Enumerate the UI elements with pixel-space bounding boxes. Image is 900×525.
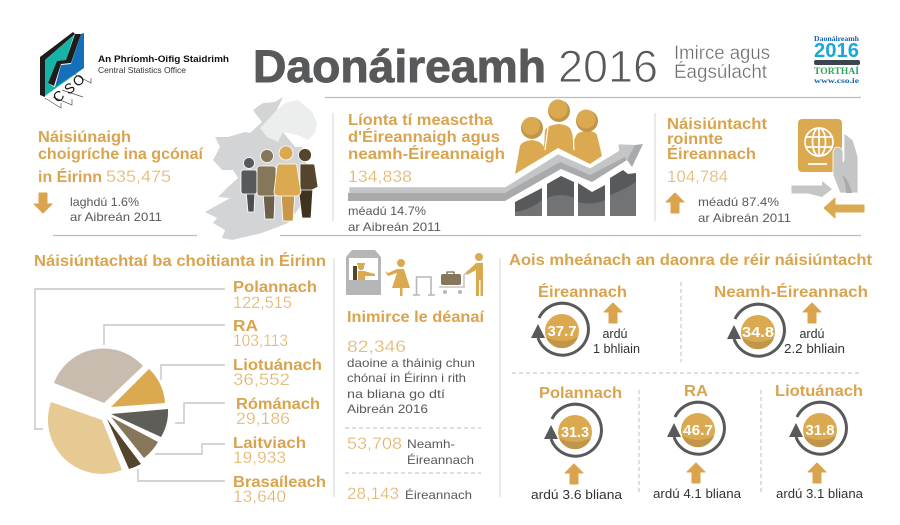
age: Irish: 37.7 xyxy=(548,323,576,340)
panel: mixed households text: 134,838 xyxy=(348,167,412,186)
panel: foreign nationals: choigríche ina gcónaí xyxy=(38,146,204,163)
age: UK: ardú 4.1 bliana xyxy=(653,487,741,501)
panel: foreign nationals: Náisiúnaigh xyxy=(38,129,131,146)
people group icon xyxy=(241,146,318,221)
panel: dual nationality text: roinnte xyxy=(667,131,723,148)
CSO logo: S xyxy=(61,79,78,97)
age: Lithuanian xyxy=(775,383,863,501)
panel: dual nationality text: ar Aibreán 2011 xyxy=(698,211,791,225)
pie labels: 36,552 xyxy=(233,370,290,389)
CSO name: Central Statistics Office xyxy=(98,65,186,75)
panel: recent immigration: 28,143 xyxy=(347,484,399,503)
panel: mixed households text: neamh-Éireannaigh xyxy=(348,144,505,163)
pie labels: 13,640 xyxy=(233,487,286,506)
census 2016 badge: TORTHAÍ xyxy=(814,66,860,76)
pie labels: RA xyxy=(233,318,258,335)
panel: mixed households text: méadú 14.7% xyxy=(348,204,426,218)
pie connector lines xyxy=(35,289,225,481)
CSO name xyxy=(98,54,229,75)
age: Irish: 1 bhliain xyxy=(593,342,640,356)
panel: recent immigration: daoine a tháinig chun xyxy=(347,356,475,370)
pie labels: Polannach xyxy=(233,279,317,296)
CSO logo: O xyxy=(69,70,88,90)
age: UK: RA xyxy=(684,383,708,400)
pie chart xyxy=(48,349,168,474)
panel: mixed households text: d'Éireannaigh agus xyxy=(348,127,500,146)
panel: foreign nationals xyxy=(34,129,204,224)
panel: recent immigration: 53,708 xyxy=(347,434,402,453)
age: Irish xyxy=(531,282,640,356)
panel: dual nationality text: méadú 87.4% xyxy=(698,195,779,209)
panel: dual nationality text: 104,784 xyxy=(667,167,728,186)
panel: recent immigration: na bliana go dtí xyxy=(347,387,446,401)
subtitle: Éagsúlacht xyxy=(674,62,768,83)
heading: median age: Aois mheánach an daonra de réir náisiúntacht xyxy=(509,252,873,269)
pie labels: 103,113 xyxy=(233,331,288,350)
census 2016 badge: www.cso.ie xyxy=(814,76,860,85)
panel: foreign nationals: in Éirinn xyxy=(38,167,102,186)
panel: recent immigration: chónaí in Éirinn i rith xyxy=(347,370,466,385)
age: UK xyxy=(653,383,741,501)
age: non-Irish: 2.2 bhliain xyxy=(784,342,845,356)
CSO logo: C xyxy=(50,87,67,106)
subtitle: Imirce agus xyxy=(674,43,770,64)
panel: recent immigration: Éireannach xyxy=(407,452,474,467)
age: Lithuanian: ardú 3.1 bliana xyxy=(776,487,863,501)
CSO logo xyxy=(40,32,91,108)
map of Ireland xyxy=(205,97,317,240)
age: Polish: 31.3 xyxy=(561,424,589,441)
age: non-Irish: 34.8 xyxy=(742,324,774,341)
age: non-Irish: ardú xyxy=(799,327,825,341)
panel: recent immigration: Aibreán 2016 xyxy=(347,402,428,416)
panel: recent immigration: Neamh- xyxy=(407,437,455,451)
age: Polish: ardú 3.6 bliana xyxy=(531,488,622,502)
pie labels: Rómánach xyxy=(236,396,320,413)
panel: dual nationality text: Náisiúntacht xyxy=(667,116,768,133)
panel: mixed households text: ar Aibreán 2011 xyxy=(348,220,441,234)
panel: recent immigration: Inimirce le déanaí xyxy=(347,309,485,326)
age: Irish: ardú xyxy=(602,327,628,341)
age: UK: 46.7 xyxy=(683,422,713,439)
panel: mixed households icon xyxy=(348,100,643,216)
age: Lithuanian: Liotuánach xyxy=(775,383,863,400)
icon: passport and hand xyxy=(792,119,864,218)
age: Polish: Polannach xyxy=(539,385,622,402)
panel: dual nationality text: Éireannach xyxy=(667,144,756,163)
age: Irish: Éireannach xyxy=(538,282,627,301)
pie labels: 19,933 xyxy=(233,448,286,467)
age: non-Irish: Neamh-Éireannach xyxy=(714,282,868,301)
CSO name: An Phríomh-Oifig Staidrimh xyxy=(98,54,229,64)
panel: mixed households text xyxy=(348,112,505,234)
panel: recent immigration xyxy=(345,309,485,503)
icon: immigration scene xyxy=(346,250,483,296)
panel: dual nationality text xyxy=(666,116,791,225)
panel: foreign nationals: ar Aibreán 2011 xyxy=(70,210,162,224)
title: Daonáireamh xyxy=(253,41,546,92)
pie labels: Liotuánach xyxy=(233,357,322,374)
pie labels: Brasaíleach xyxy=(233,474,326,491)
pie labels: Laitviach xyxy=(233,435,306,452)
title: 2016 xyxy=(558,41,658,92)
panel: recent immigration: 82,346 xyxy=(347,337,406,356)
census 2016 badge: Daonáireamh xyxy=(814,35,859,43)
age: Polish xyxy=(531,385,622,502)
age: Lithuanian: 31.8 xyxy=(806,422,834,439)
pie labels: 122,515 xyxy=(233,293,292,312)
panel: mixed households text: Líonta tí measctha xyxy=(348,112,493,129)
subtitle xyxy=(674,43,770,83)
pie labels: 29,186 xyxy=(236,409,290,428)
panel: foreign nationals: 535,475 xyxy=(106,167,171,186)
heading: common nationalities: Náisiúntachtaí ba choitianta in Éirinn xyxy=(34,251,326,270)
census 2016 badge xyxy=(814,35,860,85)
census 2016 badge: 2016 xyxy=(814,40,859,62)
panel: foreign nationals: laghdú 1.6% xyxy=(70,195,139,209)
age: non-Irish xyxy=(714,282,868,356)
pie labels xyxy=(233,279,326,506)
panel: recent immigration: Éireannach xyxy=(405,487,472,502)
